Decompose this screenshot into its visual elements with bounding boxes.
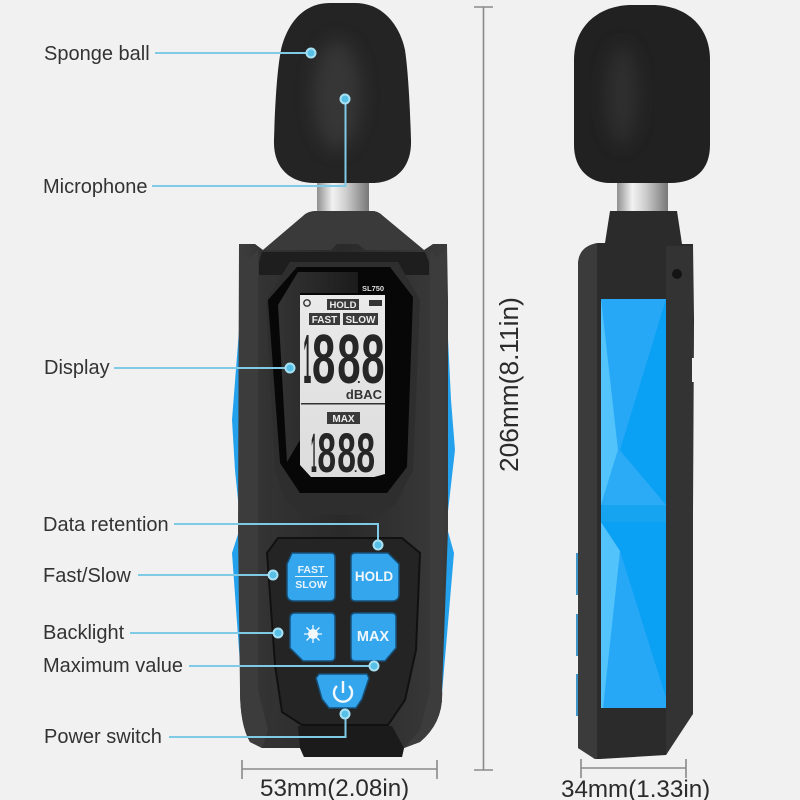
callout: power switch: Power switch: [44, 726, 162, 748]
button fast slow: SLOW: [295, 579, 327, 591]
sponge ball side: [574, 5, 710, 183]
main reading: .: [357, 371, 361, 386]
callout: display: [44, 357, 294, 379]
callout: backlight: Backlight: [43, 622, 125, 644]
device body: [238, 211, 448, 757]
fast tag: FAST: [312, 315, 337, 326]
button hold: HOLD: [355, 569, 393, 584]
metal neck front: [317, 183, 369, 211]
battery: [369, 300, 382, 306]
max reading: .: [354, 461, 357, 475]
side body: [578, 211, 694, 759]
button power: [316, 674, 369, 708]
max reading: 88: [317, 421, 356, 484]
callout: microphone: Microphone: [43, 176, 148, 198]
callout: fast slow: [43, 565, 278, 587]
max tag: MAX: [332, 414, 355, 425]
main reading: [303, 319, 385, 399]
callout: sponge ball: [44, 43, 316, 65]
main reading: 1: [303, 319, 311, 398]
max reading: [311, 421, 375, 485]
blue side panel: [601, 299, 666, 708]
main reading: 8: [361, 321, 385, 399]
front meter: [232, 3, 455, 757]
slow tag: SLOW: [346, 315, 376, 326]
callout: maximum value: [43, 655, 378, 677]
callout: microphone: [43, 94, 350, 198]
dimension: front width: [242, 760, 437, 800]
display bezel: [266, 262, 420, 515]
max reading: 1: [311, 422, 317, 485]
max tag: [327, 412, 360, 425]
dimension: height: [474, 7, 524, 770]
button fast slow: FAST: [298, 564, 325, 576]
callout: sponge ball: Sponge ball: [44, 43, 150, 65]
callout: maximum value: Maximum value: [43, 655, 183, 677]
max reading: 8: [356, 421, 375, 484]
button fast slow: [287, 553, 335, 601]
fast tag: [309, 313, 340, 326]
dimension: side width: [561, 759, 710, 800]
screen: [300, 284, 385, 485]
side meter: [574, 5, 710, 759]
button max: MAX: [357, 629, 389, 645]
main reading: 88: [312, 321, 361, 399]
screw hole: [672, 269, 682, 279]
callout: backlight: [43, 622, 282, 644]
callout: data retention: Data retention: [43, 514, 169, 536]
callout: power switch: [44, 710, 350, 748]
callout: display: Display: [44, 357, 110, 379]
metal neck side: [617, 183, 668, 211]
button hold: [351, 553, 399, 601]
hold tag: HOLD: [330, 300, 357, 311]
callout: data retention: [43, 514, 382, 550]
sponge ball front: [274, 3, 411, 183]
button max: [351, 613, 396, 661]
button backlight: [290, 613, 335, 661]
power glyph: [304, 300, 310, 306]
model label: SL750: [362, 284, 384, 293]
dimension: height: 206mm(8.11in): [494, 297, 524, 472]
callout: fast slow: Fast/Slow: [43, 565, 131, 587]
side blue accents front: [232, 318, 455, 705]
unit: dBAC: [346, 387, 383, 402]
keypad panel: [267, 538, 420, 725]
